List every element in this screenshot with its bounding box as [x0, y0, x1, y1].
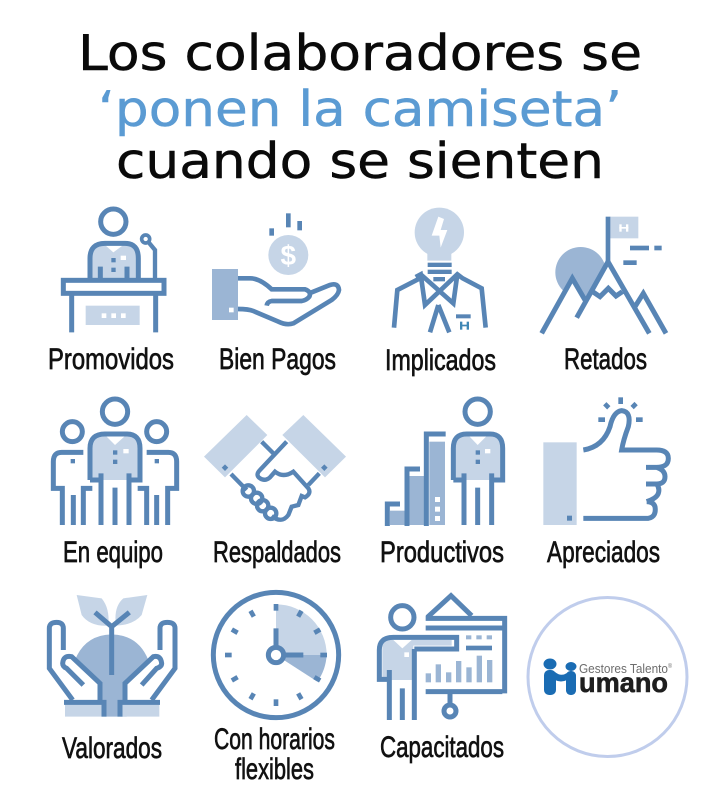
label: Retados: Retados [564, 343, 647, 376]
panel: Implicados [385, 208, 496, 377]
label: Con horarios flexibles: Con horarios [214, 723, 335, 756]
label: Productivos: Productivos [380, 536, 504, 569]
icon: mountain with flag [542, 217, 666, 335]
title: ‘ponen la camiseta’ [98, 81, 622, 138]
icon: thumbs up [543, 397, 668, 525]
icon: presenter at board [379, 596, 505, 720]
icon: person with light bulb head [394, 208, 486, 332]
panel: Apreciados [543, 397, 668, 569]
icon: person beside rising bars [387, 399, 503, 526]
panel: Respaldados [204, 415, 346, 569]
panel: Con horarios flexibles [213, 592, 339, 786]
icon: clock [213, 592, 339, 718]
icon: team of three people [53, 399, 177, 525]
title [78, 25, 642, 190]
logo text: umano: umano [579, 667, 668, 698]
label: Promovidos: Promovidos [48, 343, 174, 376]
panel: Valorados [49, 595, 175, 765]
panel: Capacitados [379, 596, 505, 764]
icon: handshake [204, 415, 346, 520]
logo circle [528, 598, 687, 756]
title: cuando se sienten [116, 133, 604, 190]
label: Con horarios flexibles: flexibles [235, 753, 314, 786]
panel: Promovidos [48, 209, 174, 376]
icon: speaker at podium [63, 209, 164, 332]
label: Bien Pagos: Bien Pagos [219, 343, 336, 376]
logo text: Gestores Talento: ® [668, 663, 673, 670]
label: Respaldados: Respaldados [213, 536, 341, 569]
panel: Bien Pagos [212, 213, 339, 376]
icon: hand with coin: $ [281, 240, 297, 271]
label: Apreciados: Apreciados [547, 536, 660, 569]
label: Implicados: Implicados [385, 344, 496, 377]
title: Los colaboradores se [78, 25, 642, 82]
icon: hand with coin [212, 213, 339, 324]
panel: logo badge [528, 598, 687, 756]
logo mark: two figures [544, 658, 576, 695]
label: Capacitados: Capacitados [380, 731, 504, 764]
icon: hands holding plant [49, 595, 175, 717]
label: Valorados: Valorados [62, 732, 162, 765]
panel: Productivos [380, 399, 504, 569]
label: Con horarios flexibles [214, 723, 335, 786]
panel: En equipo [53, 399, 177, 569]
label: En equipo: En equipo [63, 536, 163, 569]
logo text: Gestores Talento: Gestores Talento [579, 661, 677, 676]
panel: Retados [542, 217, 666, 376]
